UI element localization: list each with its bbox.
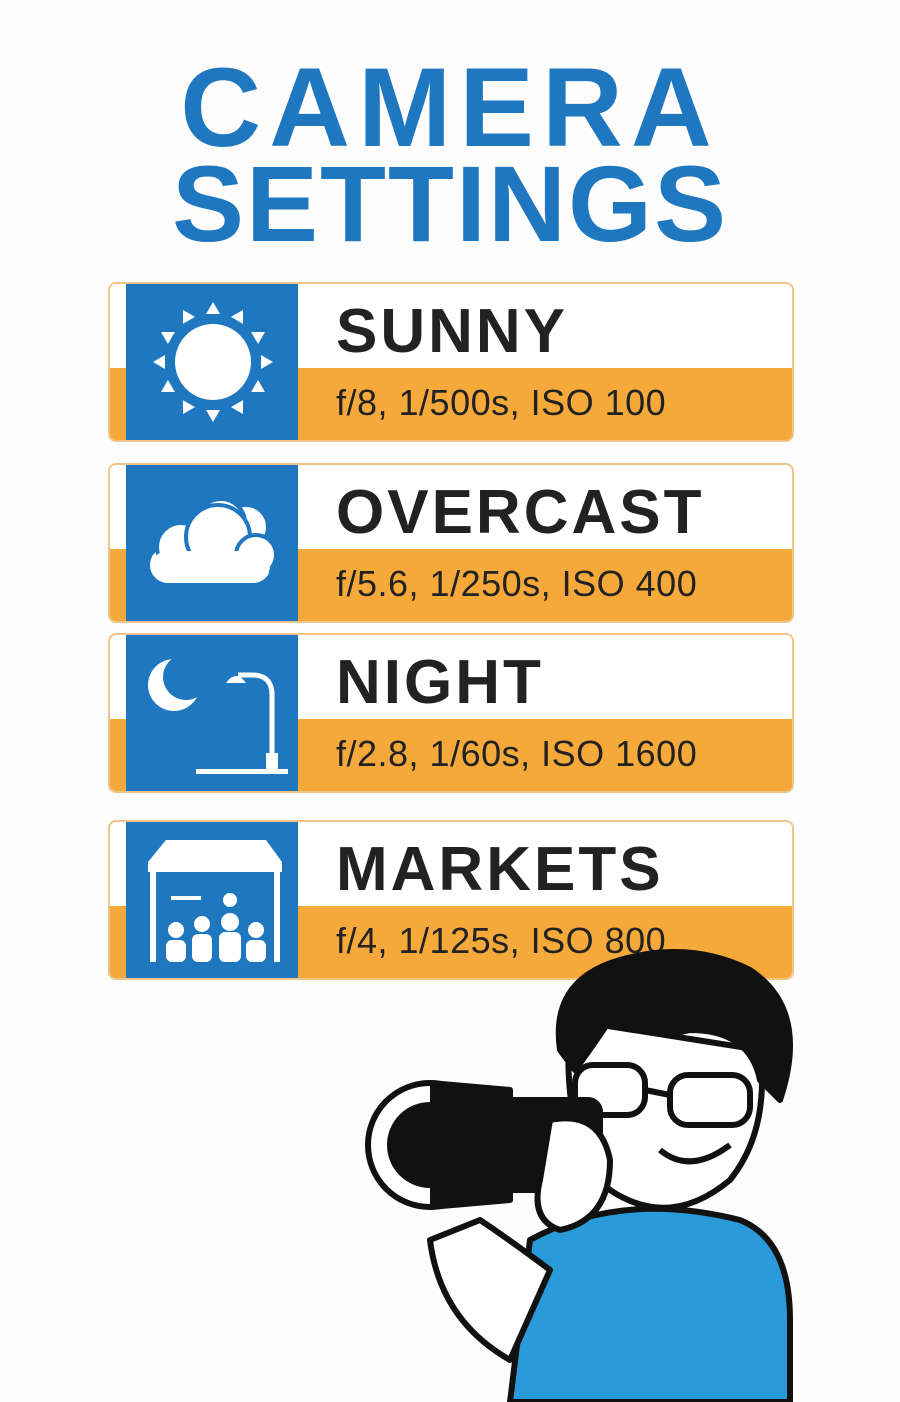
panel: sunny	[108, 282, 794, 442]
heading: NIGHT	[336, 648, 544, 717]
icon: cloud	[126, 465, 298, 621]
icon: sun	[126, 284, 298, 440]
heading: SUNNY	[336, 297, 568, 366]
panel: markets	[108, 820, 794, 980]
title: CAMERA	[180, 45, 720, 170]
illustration: photographer	[365, 949, 794, 1402]
icon: market	[126, 822, 298, 978]
heading: MARKETS	[336, 835, 664, 904]
text: specs: f/8, 1/500s, ISO 100	[336, 382, 666, 423]
icon: moon and lamp	[126, 635, 298, 791]
heading: OVERCAST	[336, 478, 704, 547]
text: specs: f/4, 1/125s, ISO 800	[336, 920, 666, 961]
text: specs: f/2.8, 1/60s, ISO 1600	[336, 733, 697, 774]
panel: overcast	[108, 463, 794, 623]
text: specs: f/5.6, 1/250s, ISO 400	[336, 563, 697, 604]
panel: night	[108, 633, 794, 793]
subtitle: SETTINGS	[172, 143, 728, 264]
